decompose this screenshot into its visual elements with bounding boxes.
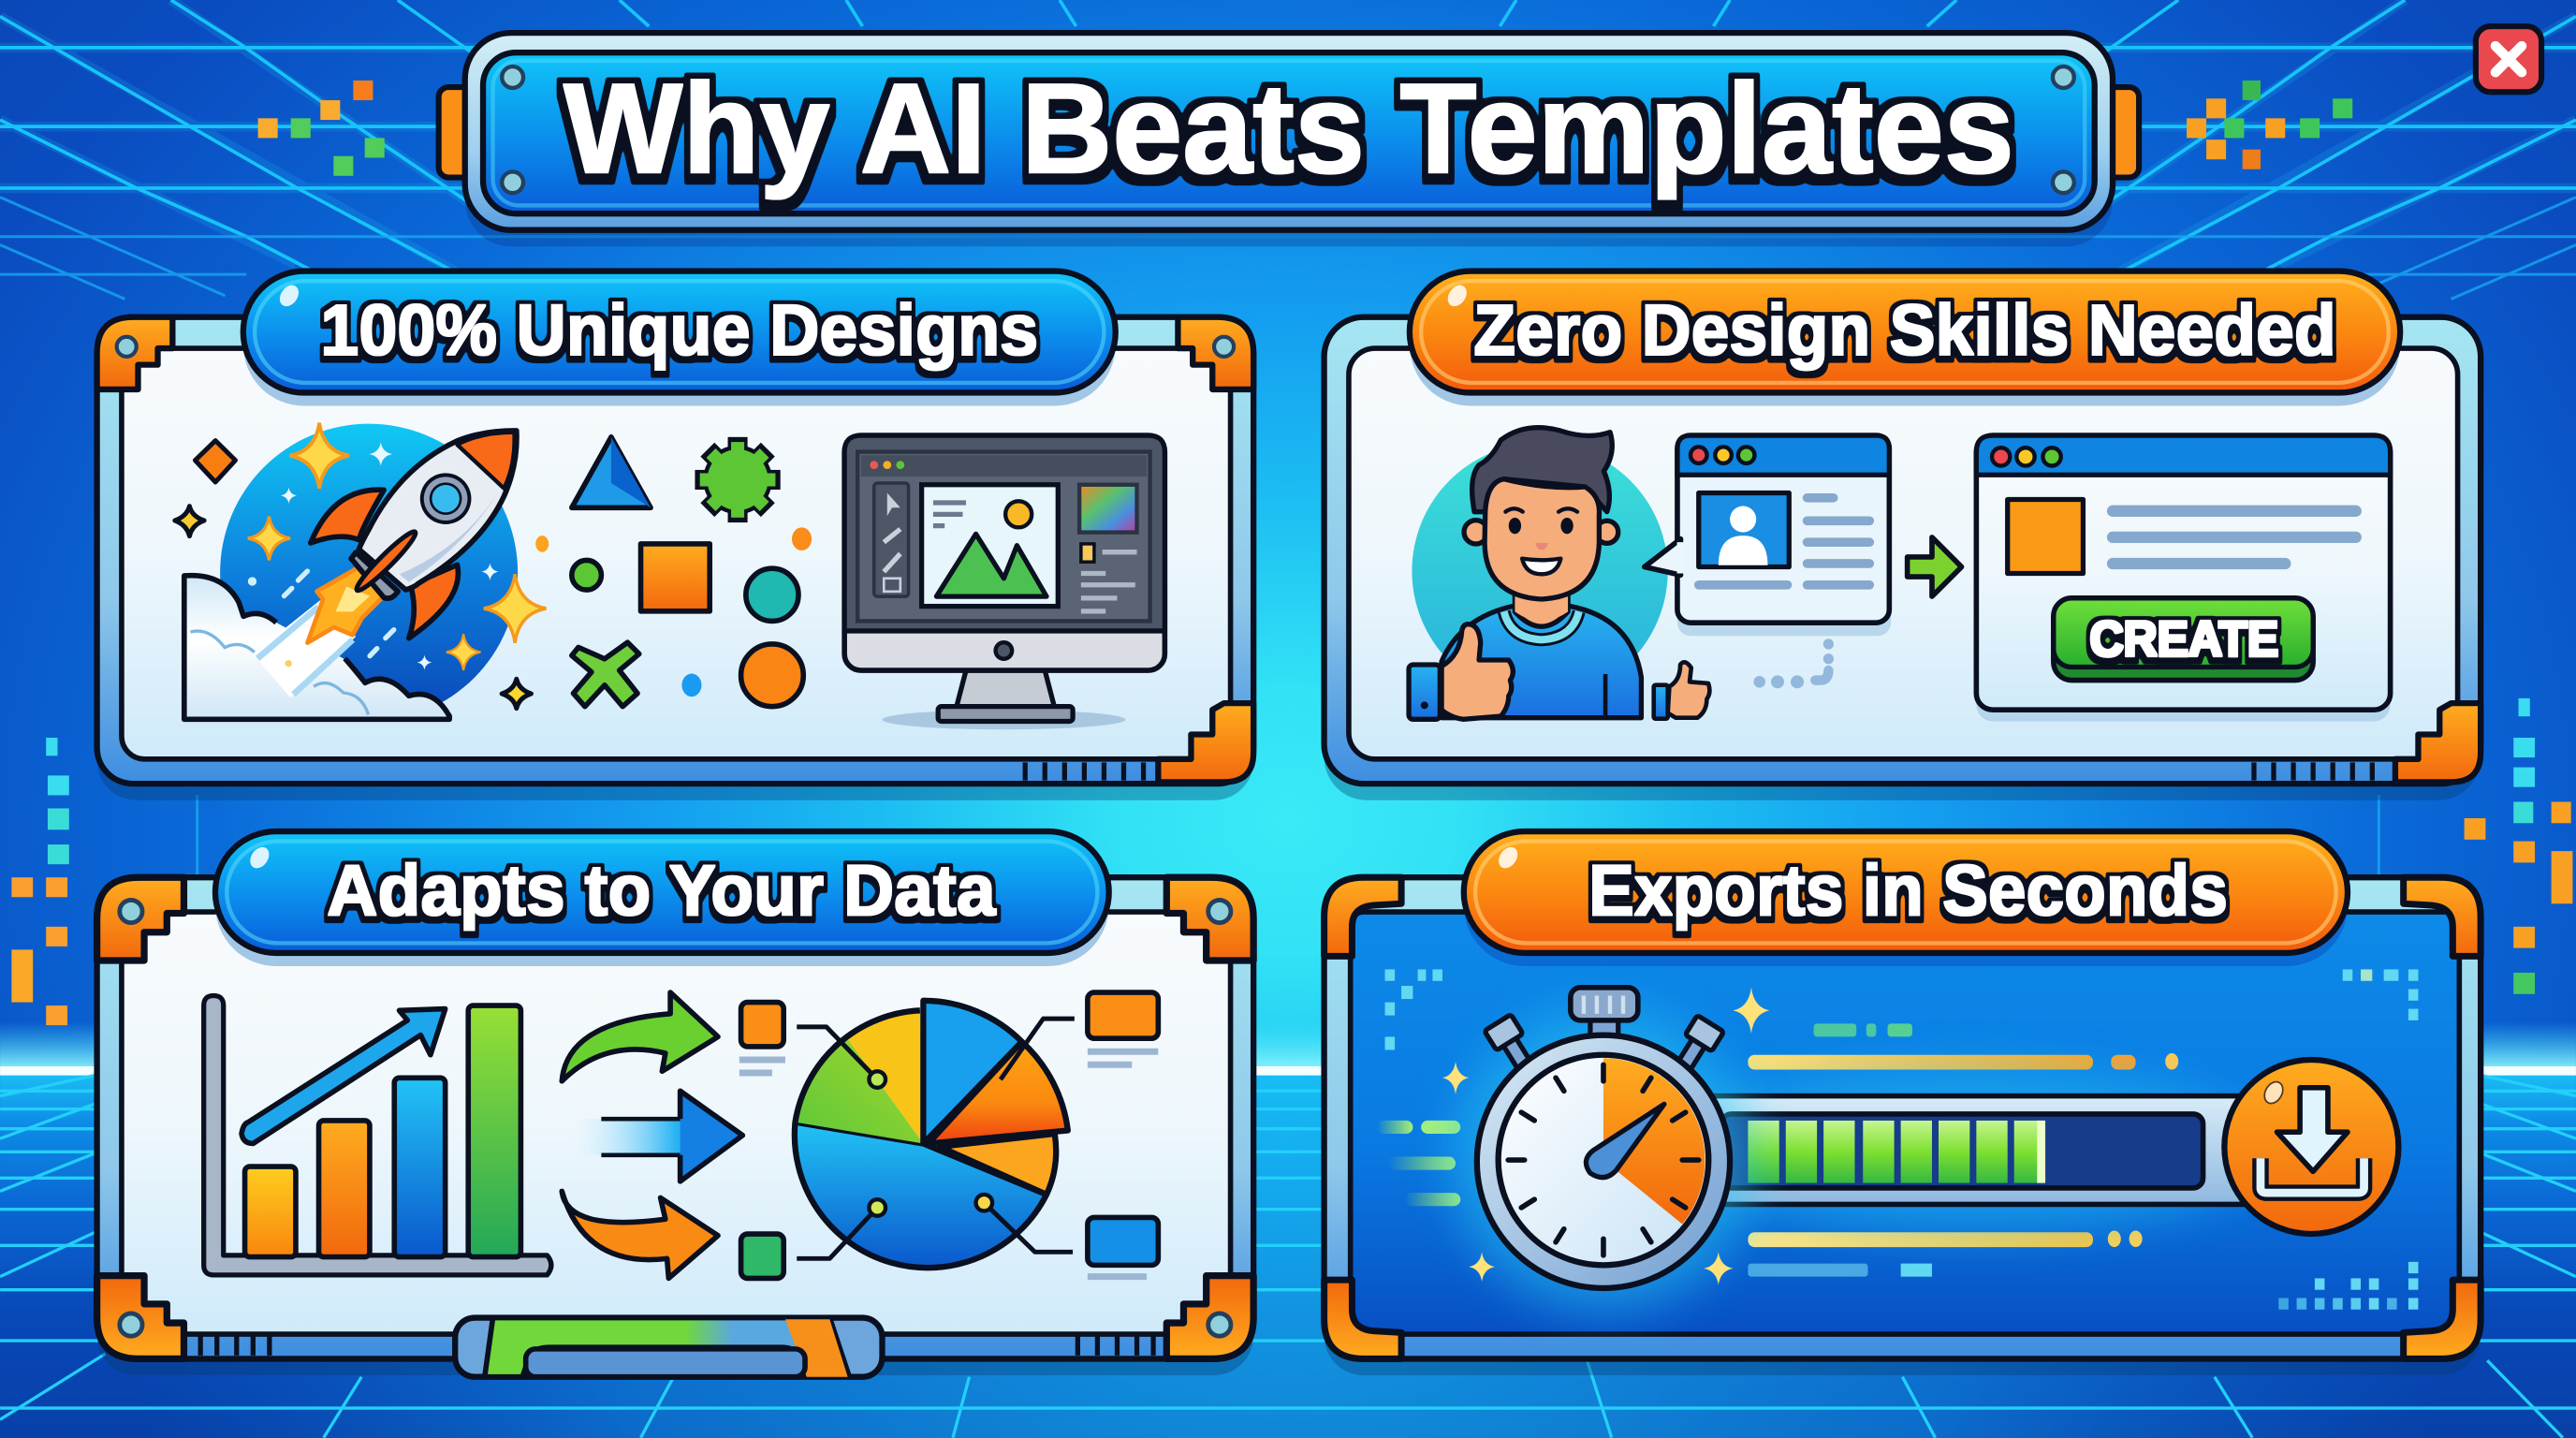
icon: large browser window with create button <box>1976 435 2391 721</box>
legend chips: right <box>1088 992 1158 1277</box>
heading pill <box>215 831 1109 966</box>
legend chips: left <box>739 1003 785 1278</box>
icon: download button <box>2224 1060 2398 1234</box>
heading pill <box>243 271 1116 405</box>
heading pill: Adapts to Your Data <box>327 851 997 932</box>
icon: shapes collection <box>535 437 812 707</box>
create button <box>2054 598 2313 681</box>
arrow: green right <box>1908 537 1962 596</box>
panel: 100% Unique Designs <box>97 271 1253 800</box>
pixel bits <box>1385 969 2418 1310</box>
icon: smiling person giving thumbs up <box>1409 428 1709 719</box>
arrows: data transformation <box>562 992 742 1278</box>
icon: gold sparkles <box>1442 988 1769 1284</box>
bar chart <box>204 996 551 1275</box>
pixel decoration: top left <box>258 81 385 176</box>
title banner <box>439 33 2139 246</box>
icon: sparkles <box>175 423 546 709</box>
pixel decoration: left edge <box>11 738 69 1025</box>
panel frame <box>1325 317 2481 800</box>
icon: desktop monitor with editor <box>844 435 1164 729</box>
icon: small browser window with speech tail <box>1645 435 1891 636</box>
panel: Zero Design Skills Needed <box>1325 271 2481 800</box>
dotted connector <box>1753 638 1834 688</box>
pixel decoration: top right <box>2187 81 2352 169</box>
progress bar <box>1676 1068 2267 1232</box>
speed lines and status bars <box>1377 1023 2178 1277</box>
close button <box>2476 26 2541 92</box>
heading pill: Exports in Seconds <box>1588 851 2228 932</box>
panel: Adapts to Your Data <box>97 831 1253 1377</box>
panel: Exports in Seconds <box>1325 831 2481 1375</box>
icon: stopwatch <box>1453 988 1754 1312</box>
icon: rocket launch <box>184 424 518 722</box>
panel frame <box>1325 877 2481 1375</box>
heading pill: Zero Design Skills Needed <box>1473 290 2336 371</box>
pixel decoration: right edge <box>2465 698 2572 994</box>
bottom connector <box>455 1318 883 1377</box>
title text: Why AI Beats Templates <box>564 57 2014 200</box>
panel frame <box>97 877 1253 1375</box>
heading pill <box>1410 271 2400 405</box>
pie chart <box>795 1001 1075 1268</box>
panel frame <box>97 317 1253 800</box>
create button: CREATE <box>2089 611 2278 667</box>
heading pill: 100% Unique Designs <box>320 290 1038 371</box>
heading pill <box>1464 831 2348 966</box>
